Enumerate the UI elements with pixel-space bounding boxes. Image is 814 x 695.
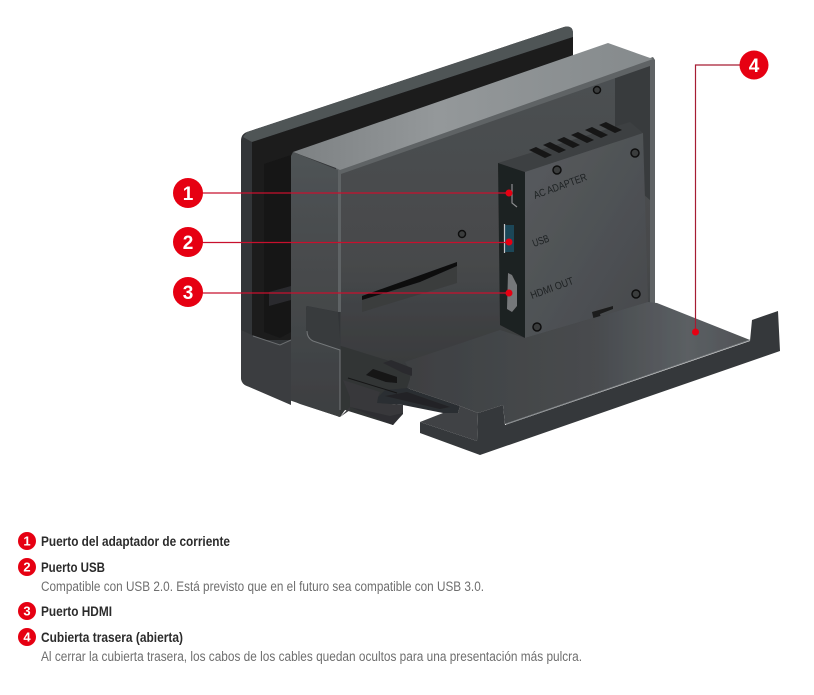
badge 2 [173,227,203,257]
badge 3 [173,277,203,307]
callout lines [188,65,754,332]
cover plate surface [405,302,750,424]
clip slots [348,360,412,393]
legend item 4: Cubierta trasera (abierta) [41,630,183,645]
notch rim [377,388,460,413]
legend item 3: 3 [23,604,31,618]
port labels: AC ADAPTER [532,171,589,202]
step highlight [307,331,340,410]
legend item 2 [18,558,484,594]
callout end dots [506,190,699,336]
inner back wall [340,65,650,417]
badge 3: 3 [183,283,193,304]
legend item 1 [18,532,230,550]
legend item 4: Al cerrar la cubierta trasera, los cabos de los cables quedan ocultos para una presentación más pulcra. [41,649,582,664]
vent slots [529,122,622,158]
screws [458,86,640,331]
back housing [241,27,573,417]
hinge clip [592,306,613,322]
badge 1 [173,178,203,208]
port box [458,86,648,338]
badge 4: 4 [749,56,760,77]
callout badges [173,50,768,307]
lower step shading [306,306,341,350]
front frame top face [293,43,653,170]
badge 2: 2 [183,233,193,254]
legend item 1: 1 [23,534,31,548]
plate edge highlight [506,340,750,424]
ports [512,184,517,207]
left tab surface [420,406,478,441]
left foot [340,380,403,425]
legend [18,532,582,664]
port labels: USB [531,233,551,250]
badge 4 [740,50,768,80]
dock illustration [241,27,780,455]
badge 1: 1 [183,184,194,205]
legend item 4: 4 [23,630,31,644]
frame edge [336,57,655,312]
right interior shadow [615,65,650,200]
legend item 2: Compatible con USB 2.0. Está previsto que en el futuro sea compatible con USB 3.0. [41,579,484,594]
cover plate front lip [420,311,780,455]
card slot [362,262,457,312]
legend item 2: Puerto USB [41,560,105,575]
port labels: HDMI OUT [529,275,576,302]
legend item 4 [18,628,582,664]
legend item 2: 2 [23,560,31,574]
base shadow under foot [338,345,412,425]
legend item 3 [18,602,112,620]
left face of frame [291,152,340,417]
legend item 1: Puerto del adaptador de corriente [41,534,230,549]
legend item 3: Puerto HDMI [41,604,112,619]
port labels [529,171,589,302]
